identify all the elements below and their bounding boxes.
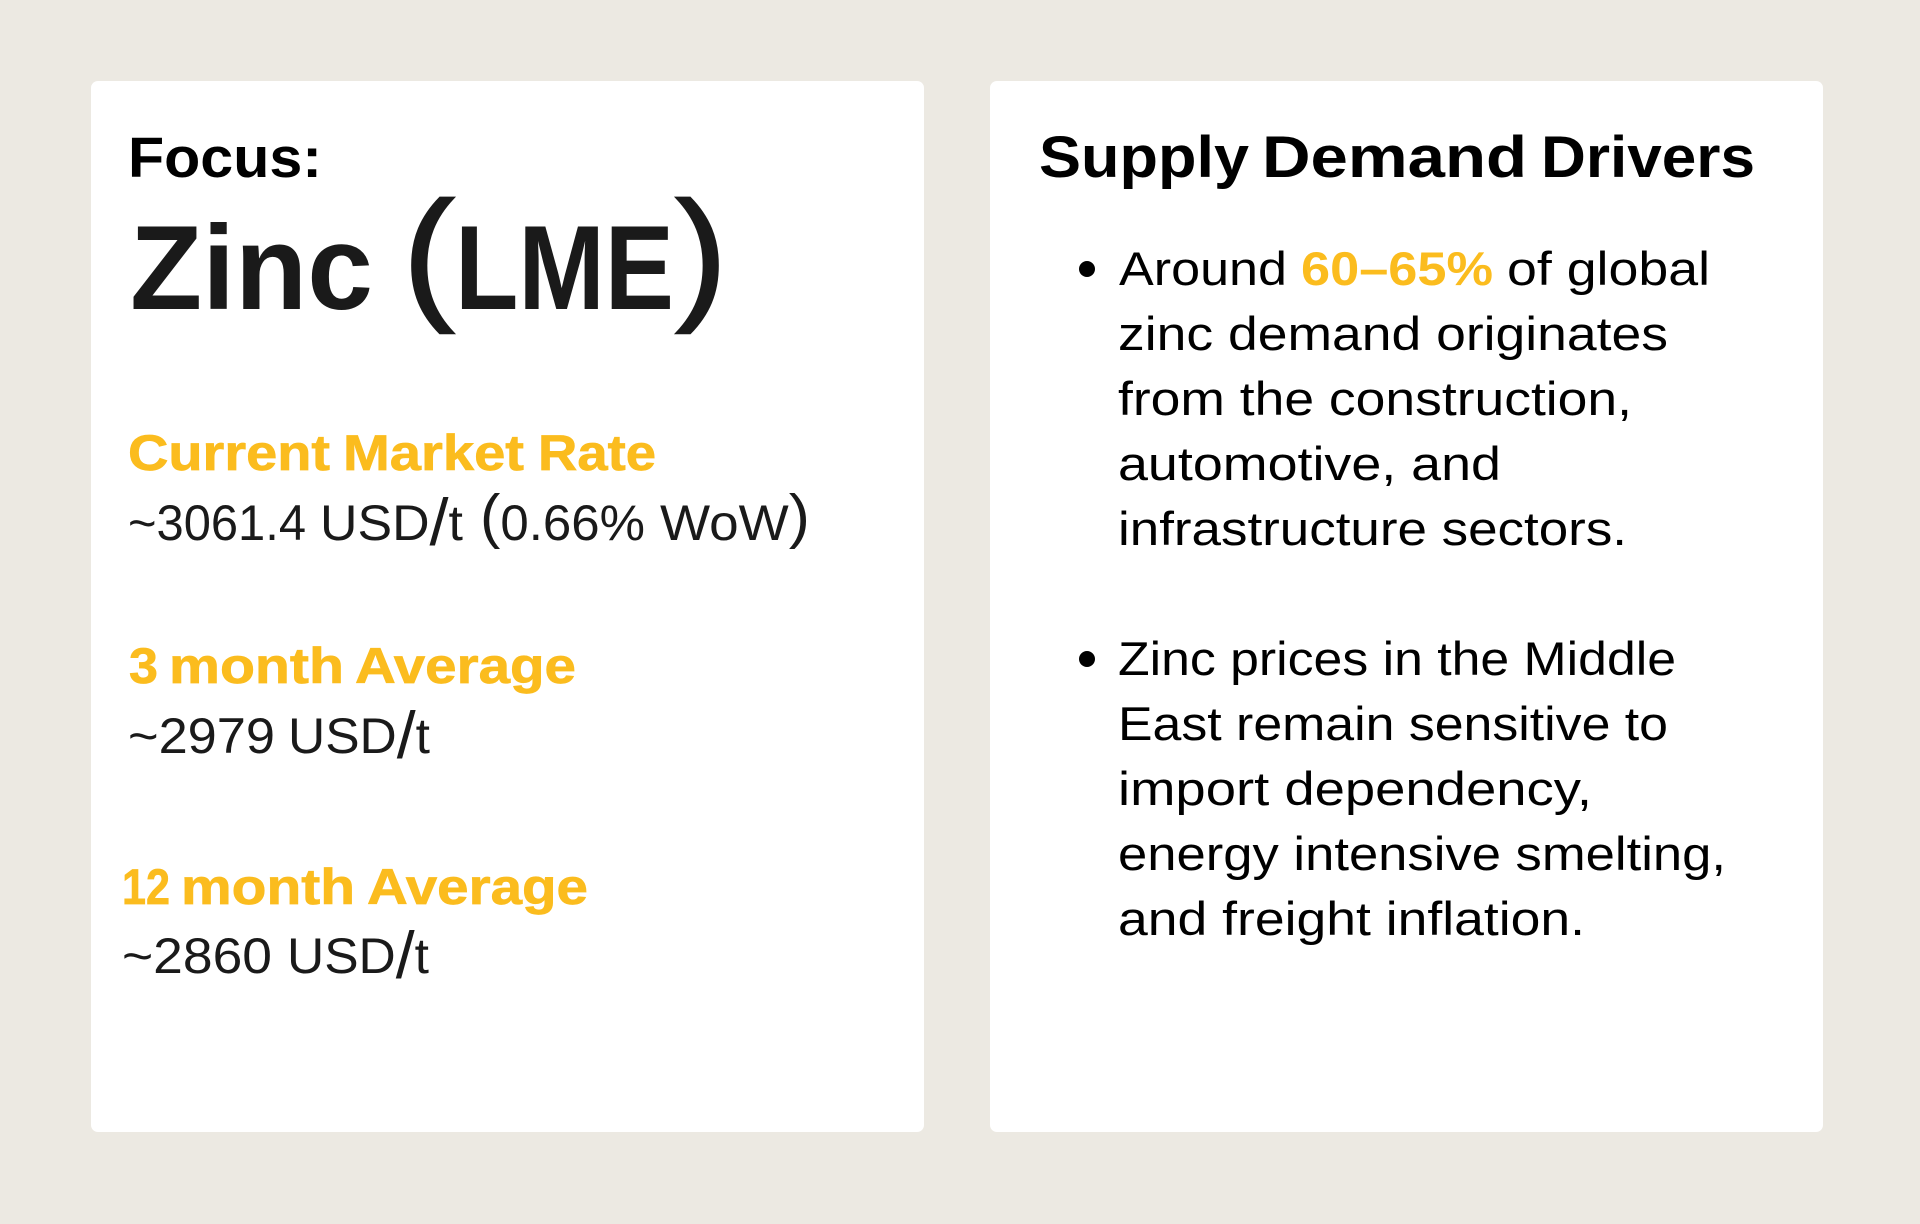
- bullet text: prices line 1: Zinc prices in the Middle: [1118, 632, 1676, 685]
- title parenthesis: open: (: [403, 172, 454, 334]
- heading: 3 month average: Average: [355, 638, 576, 694]
- value: current market rate: t: [449, 495, 463, 551]
- bullet text: prices line 4: energy intensive smelting,: [1118, 827, 1726, 880]
- title word: Zinc: Zinc: [130, 201, 373, 335]
- bullet marker: [1079, 261, 1095, 277]
- value: 12 month average: [122, 918, 429, 992]
- value: 12 month average: USD: [287, 928, 393, 984]
- bullet text: demand line 5: infrastructure sectors.: [1118, 502, 1627, 555]
- heading: current market rate: [128, 425, 656, 481]
- value: 3 month average: [128, 698, 430, 772]
- panel background: right: [990, 81, 1823, 1132]
- value: current market rate: WoW: [660, 495, 781, 551]
- bullet text: demand line 4: automotive, and: [1118, 437, 1501, 490]
- metric: 12 month average: [122, 859, 588, 992]
- panel background: left: [91, 81, 924, 1132]
- heading: 3 month average: [129, 638, 576, 694]
- heading: supply demand drivers: Drivers: [1541, 125, 1755, 190]
- value: 12 month average: /: [396, 918, 415, 992]
- heading: supply demand drivers: Supply: [1039, 125, 1249, 190]
- value: current market rate: [128, 482, 810, 559]
- value: current market rate: USD: [320, 495, 426, 551]
- value: 3 month average: ~2979: [128, 708, 275, 764]
- heading: supply demand drivers: Demand: [1262, 125, 1527, 190]
- value: 3 month average: t: [416, 708, 430, 764]
- heading: 12 month average: Average: [367, 859, 588, 915]
- bullet text: prices line 3: import dependency,: [1118, 762, 1592, 815]
- heading: current market rate: Rate: [538, 425, 656, 481]
- bullet text: prices line 5: and freight inflation.: [1118, 892, 1585, 945]
- bullet: middle east prices: [1079, 632, 1726, 945]
- heading: 3 month average: month: [169, 638, 344, 694]
- highlight: 60–65%: 60–65%: [1301, 242, 1493, 295]
- title: Zinc (LME): [130, 172, 727, 335]
- value: current market rate: ): [789, 482, 810, 549]
- metric: 3 month average: [128, 638, 576, 772]
- heading: current market rate: Market: [343, 425, 524, 481]
- bullet text: demand line 2: zinc demand originates: [1118, 307, 1668, 360]
- heading: current market rate: Current: [128, 425, 330, 481]
- value: current market rate: 0.66%: [500, 495, 645, 551]
- heading: 12 month average: month: [181, 859, 355, 915]
- panel: zinc prices: [91, 81, 924, 1132]
- value: 12 month average: t: [415, 928, 429, 984]
- bullet text: prices line 2: East remain sensitive to: [1118, 697, 1668, 750]
- value: current market rate: ~3061.4: [128, 495, 306, 551]
- value: 3 month average: USD: [288, 708, 394, 764]
- label: Focus: Focus:: [128, 126, 322, 190]
- value: current market rate: /: [430, 485, 449, 559]
- title parenthesis: close: ): [676, 172, 727, 334]
- value: current market rate: (: [480, 482, 500, 549]
- value: 3 month average: /: [397, 698, 416, 772]
- heading: 3 month average: 3: [129, 638, 158, 694]
- panel: supply demand drivers: [990, 81, 1823, 1132]
- bullet: demand: [1079, 242, 1710, 555]
- bullet text: demand line 3: from the construction,: [1118, 372, 1632, 425]
- metric: current market rate: [128, 425, 810, 559]
- bullet text: demand line 1: Around: [1119, 242, 1287, 295]
- value: 12 month average: ~2860: [122, 928, 272, 984]
- heading: supply demand drivers: [1039, 125, 1755, 190]
- bullet marker: [1079, 651, 1095, 667]
- bullet text: demand line 1 end: of global: [1507, 242, 1710, 295]
- title word: LME: LME: [455, 201, 674, 335]
- heading: 12 month average: [122, 859, 588, 915]
- heading: 12 month average: 12: [122, 859, 170, 915]
